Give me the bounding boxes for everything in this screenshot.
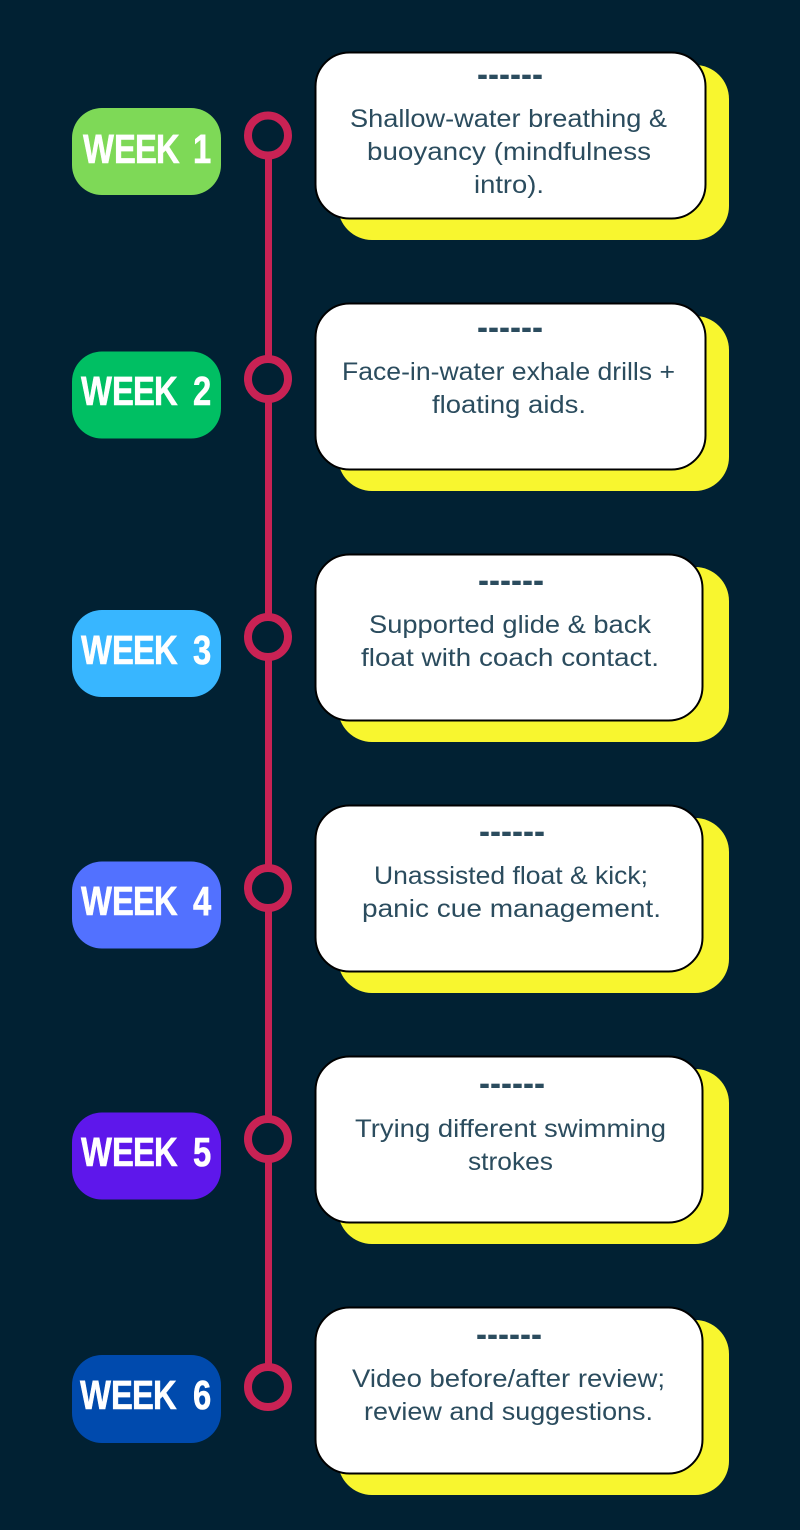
card: week 3: [316, 554, 729, 742]
white panel: [316, 554, 702, 720]
white panel: [316, 52, 706, 218]
pill: [72, 1112, 221, 1200]
yellow backing: [338, 1069, 729, 1244]
card: week 6: [316, 1308, 729, 1495]
node: week 6: [248, 1367, 288, 1407]
pill text: WEEK 5: [81, 1128, 211, 1175]
white panel: [316, 1056, 702, 1222]
description: Face-in-water exhale drills +: [342, 358, 675, 386]
dashes: ------: [477, 306, 543, 347]
pill text: WEEK 6: [80, 1371, 211, 1418]
pill text: WEEK 4: [81, 877, 212, 924]
description: panic cue management.: [362, 895, 661, 923]
description: float with coach contact.: [361, 644, 659, 672]
dashes: ------: [479, 810, 545, 851]
pill: [72, 862, 221, 948]
description: [355, 1115, 666, 1176]
description: Shallow-water breathing &: [350, 105, 667, 133]
yellow backing: [338, 65, 729, 240]
description: buoyancy (mindfulness: [367, 138, 651, 166]
description: [361, 611, 659, 672]
dashes: ------: [479, 1062, 545, 1103]
card: week 1: [316, 52, 729, 240]
yellow backing: [338, 1320, 729, 1495]
pill: [72, 610, 221, 697]
pill text: WEEK 3: [81, 626, 211, 673]
yellow backing: [338, 818, 729, 993]
node: week 3: [248, 617, 288, 657]
week 2 label: [72, 352, 221, 438]
pill: [72, 108, 221, 195]
vertical line: [265, 135, 272, 1387]
description: intro).: [474, 171, 544, 199]
week 1 label: [72, 108, 221, 195]
node: week 4: [248, 868, 288, 908]
node: week 1: [248, 116, 288, 156]
card: week 4: [316, 806, 729, 993]
description: Trying different swimming: [355, 1115, 666, 1143]
description: Video before/after review;: [352, 1365, 665, 1393]
description: [362, 862, 661, 923]
dashes: ------: [476, 1313, 542, 1354]
week 4 label: [72, 862, 221, 948]
dashes: ------: [477, 53, 543, 94]
node: week 2: [248, 359, 288, 399]
yellow backing: [338, 567, 729, 742]
description: [350, 105, 667, 199]
description: [342, 358, 675, 419]
pill text: WEEK 1: [83, 125, 211, 172]
timeline spine: [248, 116, 288, 1407]
description: floating aids.: [432, 391, 586, 419]
description: Unassisted float & kick;: [374, 862, 648, 890]
dashes: ------: [478, 559, 544, 600]
white panel: [316, 806, 702, 972]
yellow backing: [338, 316, 729, 491]
description: strokes: [468, 1148, 553, 1176]
week 5 label: [72, 1112, 221, 1200]
white panel: [316, 1308, 702, 1474]
description: review and suggestions.: [364, 1398, 653, 1426]
week 6 label: [72, 1355, 221, 1443]
card: week 2: [316, 304, 729, 491]
week 3 label: [72, 610, 221, 697]
pill text: WEEK 2: [81, 367, 211, 414]
node: week 5: [248, 1119, 288, 1159]
card: week 5: [316, 1056, 729, 1244]
description: [352, 1365, 665, 1426]
white panel: [316, 304, 706, 470]
description: Supported glide & back: [369, 611, 652, 639]
pill: [72, 352, 221, 438]
pill: [72, 1355, 221, 1443]
